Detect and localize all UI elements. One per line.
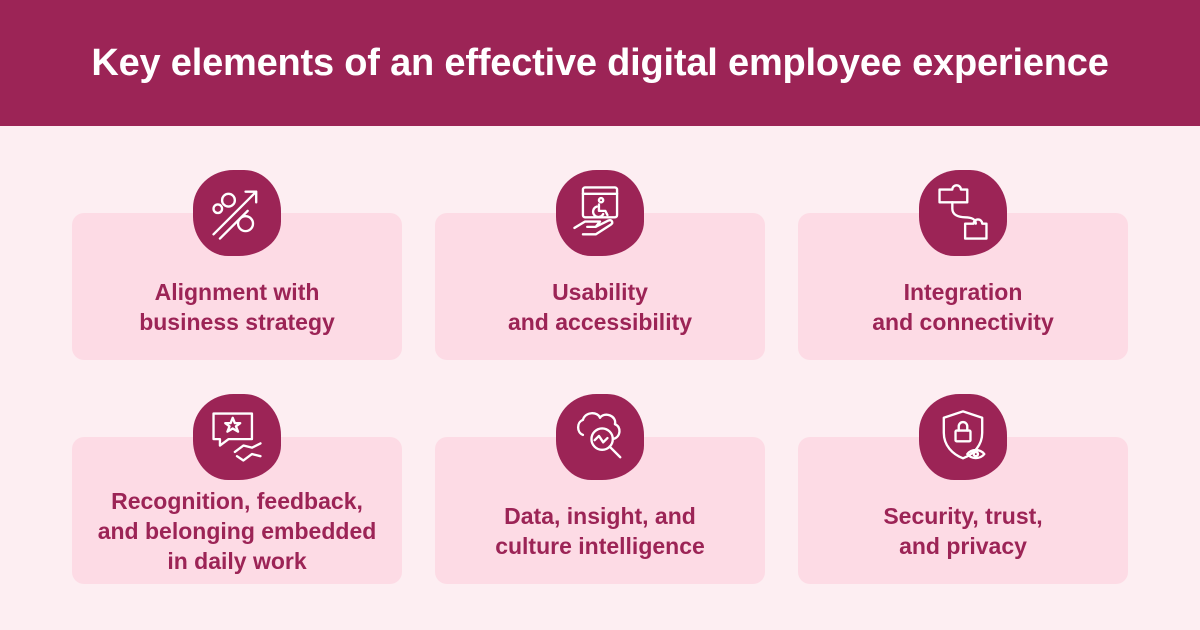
card: recognition: and belonging embedded (98, 518, 376, 544)
icon: recognition handshake (193, 394, 281, 480)
title: Key elements of an effective digital employee experience (91, 42, 1109, 84)
icon: puzzle (919, 170, 1007, 256)
card: alignment: business strategy (139, 309, 335, 335)
card: recognition: in daily work (167, 548, 307, 574)
card: usability: Usability (552, 279, 648, 305)
card: alignment: Alignment with (155, 279, 319, 305)
card: recognition: Recognition, feedback, (111, 488, 363, 514)
icon: accessibility hand (556, 170, 644, 256)
card: recognition (72, 437, 402, 584)
icon: brain magnifier (556, 394, 644, 480)
card: security: Security, trust, (883, 503, 1043, 529)
card: data: culture intelligence (495, 533, 705, 559)
title (0, 0, 1200, 126)
card: alignment (72, 213, 402, 360)
card: security: and privacy (899, 533, 1027, 559)
icon: security shield (919, 394, 1007, 480)
card: security (798, 437, 1128, 584)
card: usability: and accessibility (508, 309, 692, 335)
card: integration: Integration (904, 279, 1022, 305)
card: integration: and connectivity (872, 309, 1054, 335)
card: data (435, 437, 765, 584)
icon: gears arrow (193, 170, 281, 256)
card: usability (435, 213, 765, 360)
card: data: Data, insight, and (504, 503, 696, 529)
card: integration (798, 213, 1128, 360)
